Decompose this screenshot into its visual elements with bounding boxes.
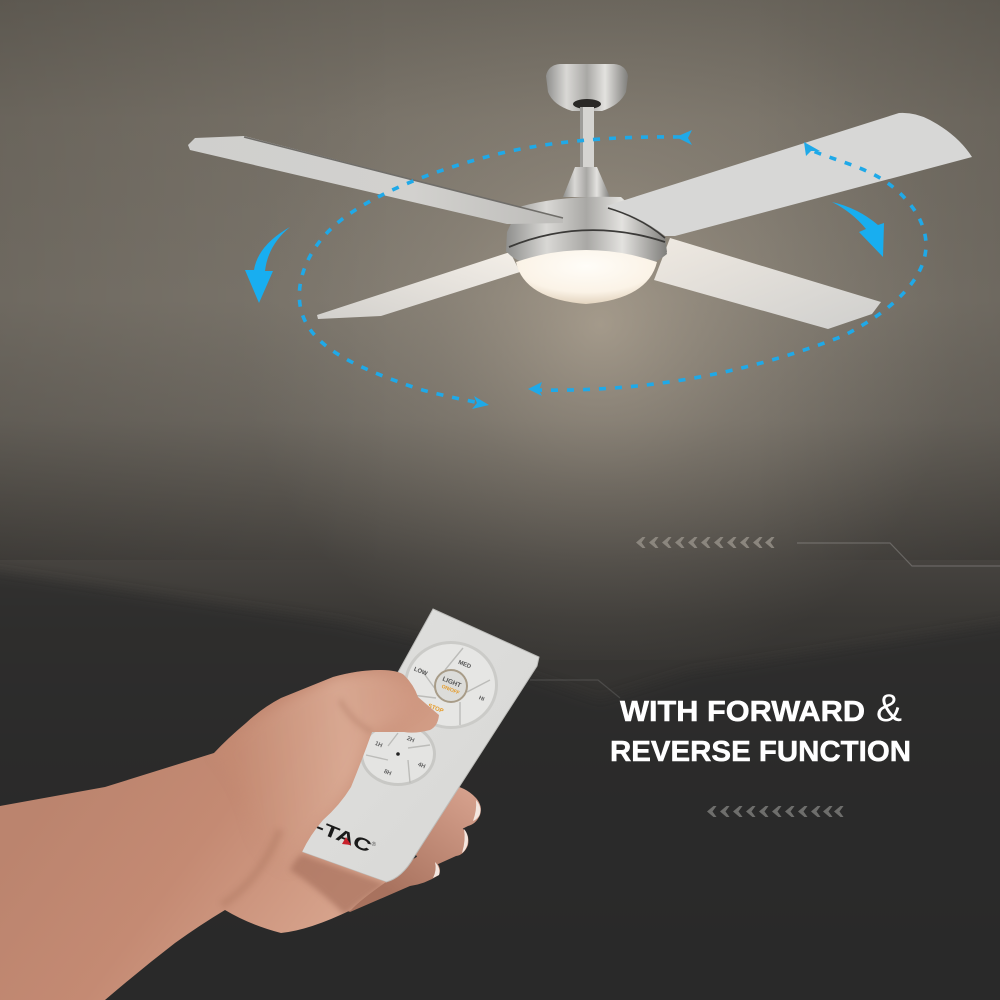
heading line 2: REVERSE FUNCTION [610, 736, 911, 768]
rotation path: lower dashed arc [535, 151, 926, 390]
finger: ring [320, 855, 440, 912]
fan downrod [573, 99, 601, 169]
finger: index [420, 785, 481, 840]
button cluster: timer: 1H [374, 741, 383, 749]
hand: forearm and thumb [0, 670, 439, 1000]
big curved arrow: right [832, 202, 884, 257]
remote body [302, 609, 539, 882]
fingernail: ring [433, 862, 440, 878]
hand: palm highlight [215, 670, 396, 914]
button cluster: fan speed: LOW [413, 667, 428, 678]
arrowhead: bottom left [472, 396, 489, 409]
remote control [299, 609, 539, 882]
decorative chevrons: lower row [707, 806, 844, 817]
ampersand: & [876, 687, 902, 730]
blade: upper left [188, 136, 563, 224]
button cluster: fan speed: HI [478, 695, 485, 703]
motor neck [563, 167, 610, 197]
button cluster: timer [360, 722, 436, 786]
fingernail: index [473, 800, 480, 821]
decorative chevrons: upper row [636, 537, 774, 548]
finger: middle [410, 825, 468, 870]
blade: lower right [654, 238, 881, 329]
motor seam [608, 208, 665, 238]
button cluster: fan speed [404, 641, 498, 729]
lamp glass [516, 250, 657, 304]
button cluster: timer: 4H [417, 762, 426, 770]
heading line 1: WITH FORWARD [620, 696, 865, 728]
blade: upper right [606, 113, 972, 236]
fan canopy [546, 64, 628, 111]
button cluster: fan speed: ON/OFF [440, 684, 460, 696]
ceiling fan [188, 64, 972, 329]
button cluster: fan speed: MED [457, 660, 472, 671]
blade: lower left [317, 252, 520, 319]
lower ring seam [509, 230, 665, 247]
button cluster: fan speed: STOP [427, 703, 444, 715]
brand logo: V-TAC: ® [370, 840, 378, 849]
fingernail: middle [462, 829, 468, 853]
button cluster: timer: 8H [383, 769, 392, 777]
button cluster: fan speed: LIGHT [441, 676, 462, 690]
motor upper housing [506, 197, 667, 252]
hand: fingers behind remote [320, 785, 481, 912]
rotation path: upper dashed arc [299, 137, 680, 403]
motor lower ring [507, 230, 667, 268]
arrowhead: top [676, 130, 692, 145]
arrowhead: upper right [804, 142, 820, 156]
arrowhead: bottom centre [528, 382, 542, 396]
brand logo: V-TAC: V-TAC [299, 811, 374, 856]
brand logo: V-TAC [299, 811, 378, 856]
button cluster: timer: 2H [406, 736, 415, 744]
heading: with forward and reverse function [610, 687, 911, 768]
big curved arrow: left [245, 227, 290, 303]
blade: upper left edge [244, 137, 563, 218]
